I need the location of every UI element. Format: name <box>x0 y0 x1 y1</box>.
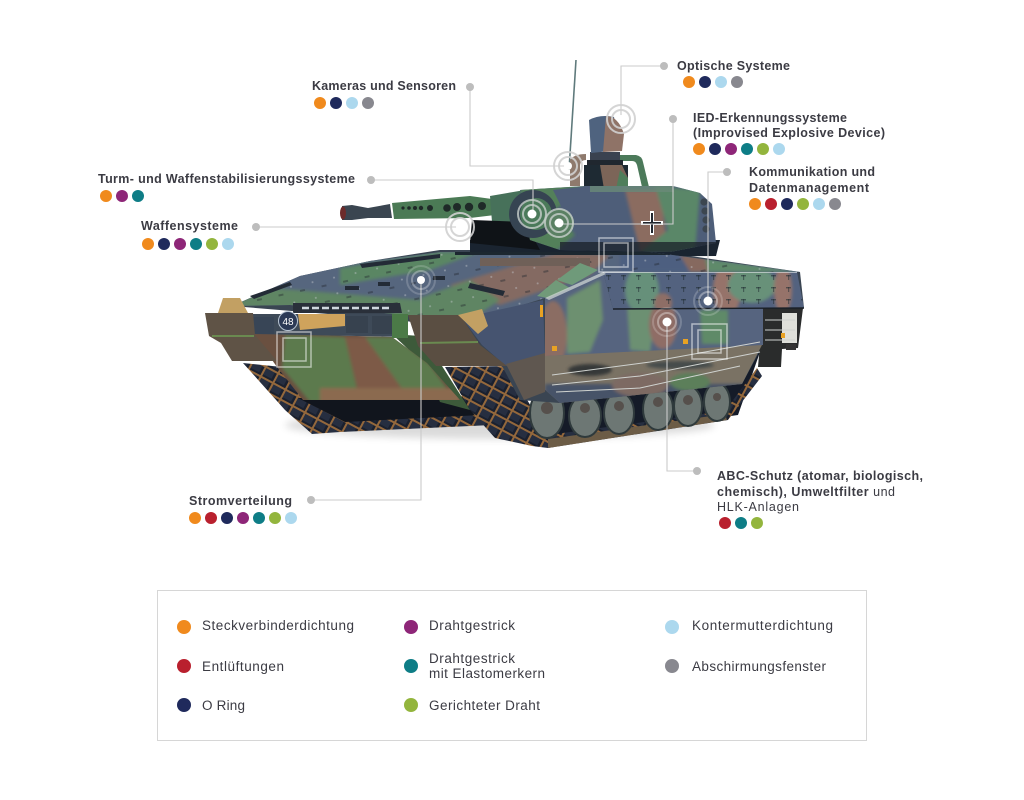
legend item: Entlüftungen: Entlüftungen <box>202 659 284 674</box>
label: Optische Systeme: Optische Systeme <box>677 59 790 73</box>
legend item: Drahtgestrick: Drahtgestrick <box>429 618 515 633</box>
label: Stromverteilung: Stromverteilung <box>189 494 292 508</box>
sensor mast <box>570 116 649 189</box>
label: Waffensysteme: Waffensysteme <box>141 219 238 233</box>
nose plate <box>462 300 545 366</box>
target marker: optical systems <box>607 105 635 133</box>
front upper band <box>218 298 408 338</box>
tracks and wheels, rear <box>243 352 762 448</box>
nose fender <box>506 353 545 400</box>
mantlet <box>509 186 590 238</box>
target marker: stabilisation <box>518 200 546 228</box>
hull lower side <box>545 345 762 403</box>
label: Kommunikation und Datenmanagement: Kommunikation und <box>749 165 875 179</box>
label: IED-Erkennungssysteme <box>669 111 885 155</box>
deck hatches <box>250 254 505 299</box>
label: Kameras und Sensoren: Kameras und Sensoren <box>312 79 456 93</box>
label: ABC-Schutz <box>693 467 923 529</box>
square marker: side <box>692 324 727 359</box>
label: Kommunikation und Datenmanagement: Datenmanagement <box>749 181 870 195</box>
target marker: ABC <box>653 308 681 336</box>
legend item: Drahtgestrick mit Elastomerkern: Drahtgestrick <box>429 651 515 666</box>
label: Turm- und Waffenstabilisierungssysteme: Turm- und Waffenstabilisierungssysteme <box>98 172 355 186</box>
antenna <box>569 60 576 170</box>
leader lines <box>256 66 727 500</box>
turret <box>515 184 720 254</box>
side mid panels <box>545 272 763 356</box>
number plate: 48 <box>282 317 294 328</box>
label: IED-Erkennungssysteme: (Improvised Explosive Device) <box>693 126 885 140</box>
label: Kommunikation und Datenmanagement <box>723 165 875 210</box>
rear block <box>758 308 803 367</box>
legend item: O Ring: O Ring <box>202 698 245 713</box>
main gun <box>340 190 540 250</box>
deck light panels <box>537 263 598 298</box>
square marker: deck <box>599 238 633 272</box>
label: Optische Systeme <box>660 59 790 88</box>
left mud plate <box>205 313 277 361</box>
number plate <box>278 312 298 330</box>
legend item: Drahtgestrick mit Elastomerkern: mit Elastomerkern <box>429 666 545 681</box>
target marker: weapons <box>446 213 474 241</box>
label: ABC-Schutz: ABC-Schutz (atomar, biologisch, <box>717 469 923 483</box>
right mud plate <box>408 315 507 366</box>
target marker: communication <box>694 287 722 315</box>
label: ABC-Schutz: chemisch), Umweltfilter und <box>717 485 895 499</box>
hull backdrop <box>232 250 804 403</box>
legend item: Drahtgestrick mit Elastomerkern <box>404 651 545 681</box>
side upper armour with slats <box>604 272 804 308</box>
cross emblem <box>641 211 663 235</box>
ground shadow <box>285 411 715 439</box>
label: IED-Erkennungssysteme: IED-Erkennungssysteme <box>693 111 847 125</box>
legend item: Steckverbinderdichtung: Steckverbinderdichtung <box>202 618 354 633</box>
legend item: Kontermutterdichtung: Kontermutterdichtung <box>692 618 833 633</box>
label: Stromverteilung <box>189 494 315 524</box>
label: Kameras und Sensoren <box>312 79 474 109</box>
gap fill between front plate and tracks <box>392 334 470 410</box>
front lower plate <box>254 334 460 400</box>
smoke launchers <box>700 198 710 233</box>
square marker: front <box>277 332 311 367</box>
orange lights <box>540 305 785 351</box>
target marker: cameras <box>554 152 582 180</box>
label: Waffensysteme <box>141 219 260 250</box>
road wheels <box>530 383 730 438</box>
target marker: IED <box>545 209 573 237</box>
legend item: Gerichteter Draht: Gerichteter Draht <box>429 698 540 713</box>
legend item: O Ring <box>177 698 245 713</box>
tank illustration <box>205 60 806 448</box>
turret ring and deck superstructure <box>470 240 720 258</box>
legend panel <box>158 590 866 740</box>
target marker: power <box>407 266 435 294</box>
legend item: Abschirmungsfenster: Abschirmungsfenster <box>692 659 826 674</box>
label: Turm- und Waffenstabilisierungssysteme <box>98 172 375 202</box>
hand rails <box>552 320 795 392</box>
label: ABC-Schutz: HLK-Anlagen <box>717 500 799 514</box>
hull deck <box>242 252 800 315</box>
